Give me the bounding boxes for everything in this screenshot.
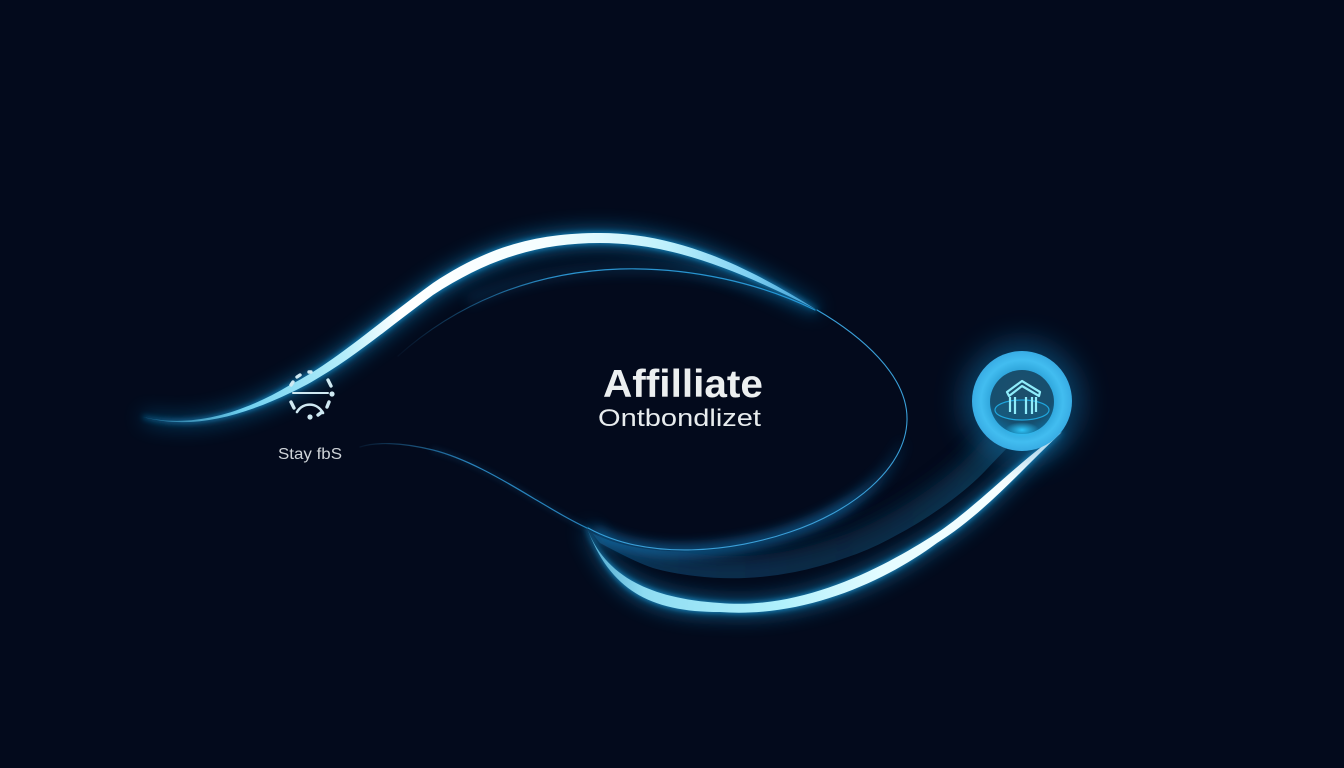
upper light ribbon xyxy=(143,233,817,422)
dark band beneath the inner arc xyxy=(590,440,1015,578)
title line one: Affilliate xyxy=(603,363,763,406)
lower light ribbon xyxy=(587,432,1062,613)
title xyxy=(598,363,763,432)
icon: glowing bank badge xyxy=(962,341,1082,461)
inner arc: thin glowing line xyxy=(360,269,907,551)
title line two: Ontbondlizet xyxy=(598,405,761,432)
label: Stay fbS: Stay fbS xyxy=(278,446,342,463)
icon: dashed circle transfer symbol xyxy=(291,372,335,420)
